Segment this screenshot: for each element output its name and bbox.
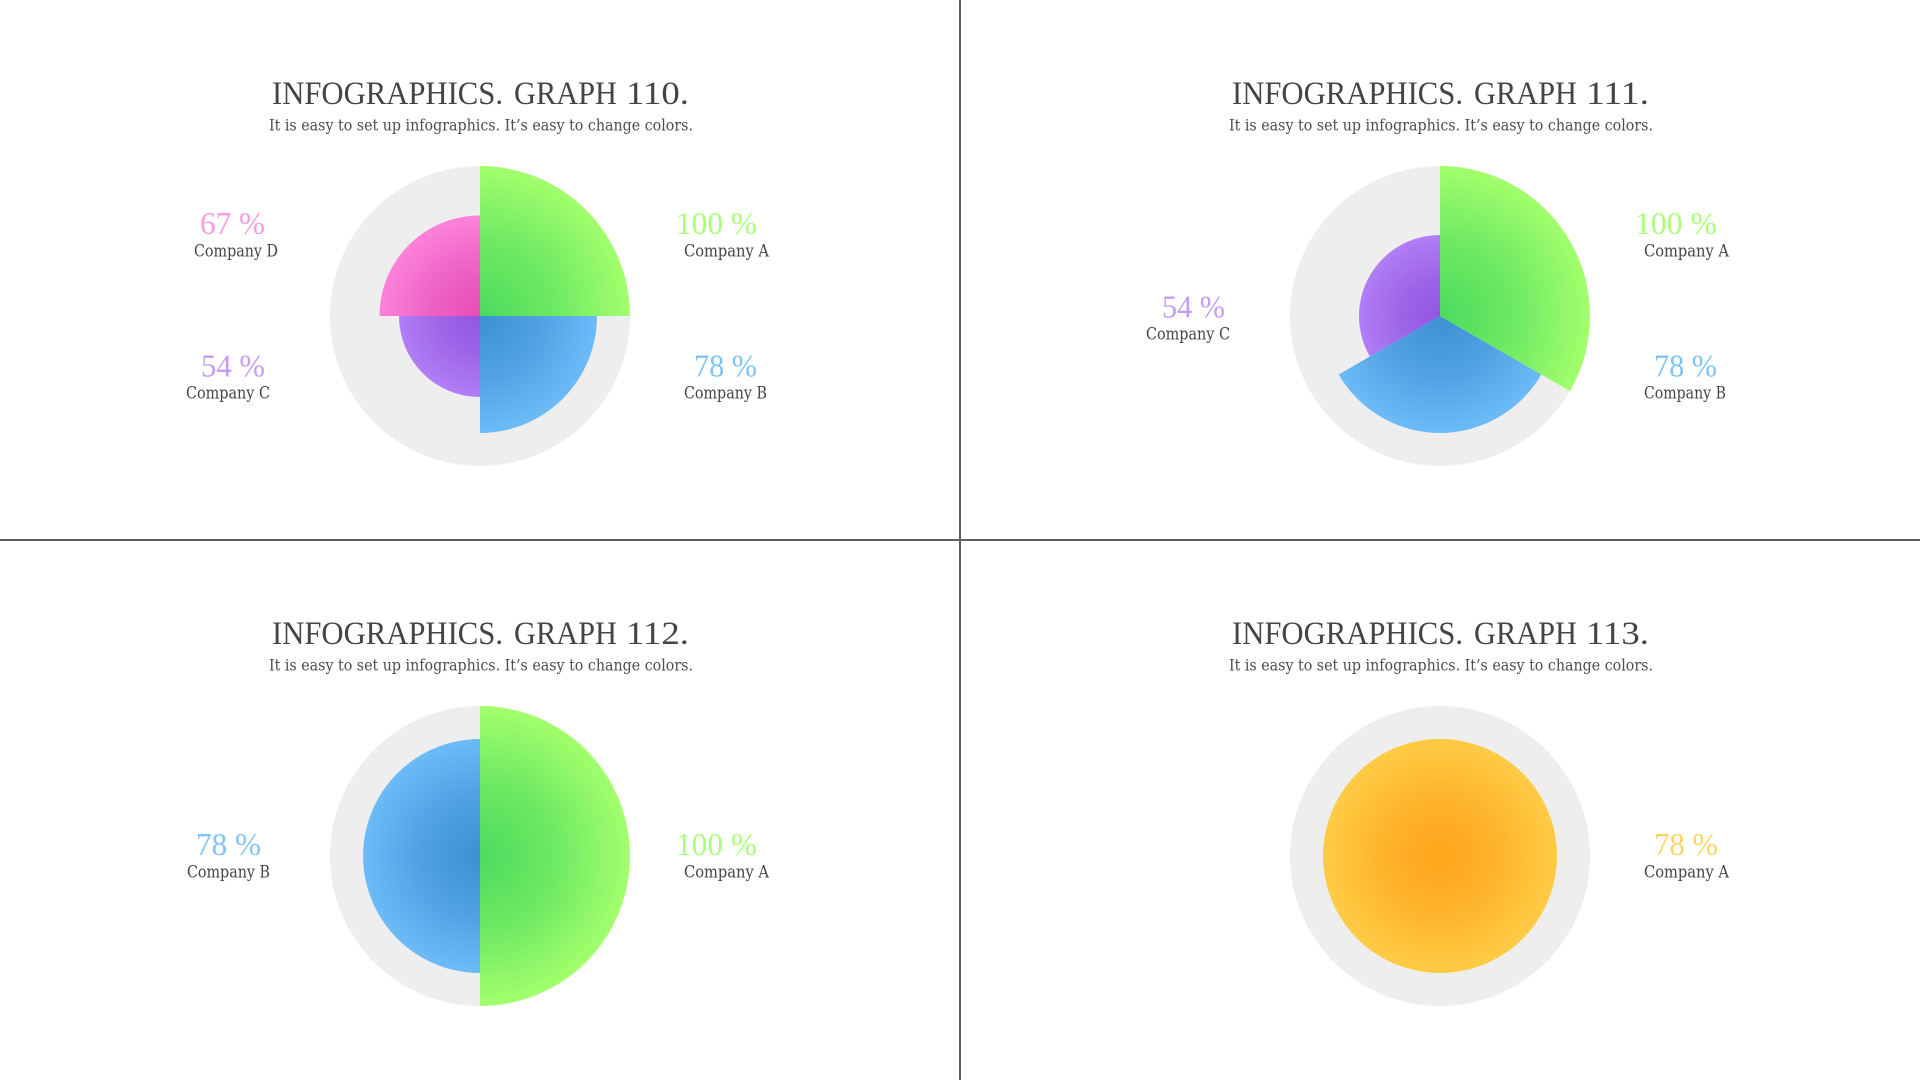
panel: graph 112	[187, 616, 770, 1006]
panel: graph 113	[1229, 616, 1730, 1006]
label: company B: Company B	[1644, 384, 1726, 402]
label: company B: Company B	[684, 384, 767, 402]
label: company B: 78 %	[694, 348, 757, 384]
label: company A: Company A	[1644, 242, 1730, 260]
label: company A: Company A	[684, 862, 770, 882]
chart: graph 112 radial halves	[330, 706, 630, 1006]
label: company A: 100 %	[1635, 205, 1717, 241]
panel: graph 110	[186, 76, 770, 466]
heading: graph 113: GRAPH	[1474, 616, 1577, 652]
label: company C: 54 %	[1162, 288, 1225, 324]
label: company B	[684, 348, 767, 402]
heading: graph 110: GRAPH	[514, 76, 617, 112]
subtitle: graph 111: It is easy to set up infographics. It’s easy to change colors.	[1229, 116, 1653, 134]
label: company C: Company C	[1146, 324, 1230, 344]
subtitle: graph 113: It is easy to set up infographics. It’s easy to change colors.	[1229, 656, 1653, 674]
heading: graph 112: GRAPH	[514, 616, 617, 652]
label: company A	[1644, 826, 1730, 882]
label: company B: 78 %	[196, 826, 261, 862]
label: company A: Company A	[1644, 862, 1730, 882]
subtitle: graph 112: It is easy to set up infographics. It’s easy to change colors.	[269, 656, 693, 674]
label: company A	[1635, 205, 1730, 260]
heading: graph 110: 110.	[626, 76, 689, 112]
label: company B	[187, 826, 270, 882]
label: company A: 100 %	[676, 826, 757, 862]
heading: graph 110: INFOGRAPHICS.	[272, 76, 503, 112]
label: company C	[1146, 288, 1230, 344]
label: company D: 67 %	[200, 205, 265, 241]
label: company D	[194, 205, 278, 260]
heading: graph 112: INFOGRAPHICS.	[272, 616, 503, 652]
label: company A: 78 %	[1654, 826, 1718, 862]
heading: graph 113: INFOGRAPHICS.	[1232, 616, 1463, 652]
label: company C	[186, 348, 270, 402]
label: company A: 100 %	[676, 205, 757, 241]
label: company A	[676, 826, 770, 882]
chart: graph 110 radial quarters	[330, 166, 630, 466]
heading: graph 111: GRAPH	[1474, 76, 1577, 112]
label: company B: Company B	[187, 862, 270, 882]
subtitle: graph 110: It is easy to set up infographics. It’s easy to change colors.	[269, 116, 693, 134]
heading: graph 113: 113.	[1586, 616, 1649, 652]
label: company C: 54 %	[201, 348, 265, 384]
label: company A	[676, 205, 770, 260]
label: company A: Company A	[684, 242, 770, 260]
label: company B	[1644, 348, 1726, 402]
chart: graph 113 radial circle	[1290, 706, 1590, 1006]
label: company C: Company C	[186, 384, 270, 402]
label: company B: 78 %	[1654, 348, 1717, 384]
panel: graph 111	[1146, 76, 1730, 466]
chart: graph 111 radial thirds	[1290, 166, 1590, 466]
label: company D: Company D	[194, 242, 278, 260]
heading: graph 111: INFOGRAPHICS.	[1232, 76, 1463, 112]
heading: graph 112: 112.	[626, 616, 689, 652]
heading: graph 111: 111.	[1586, 76, 1649, 112]
